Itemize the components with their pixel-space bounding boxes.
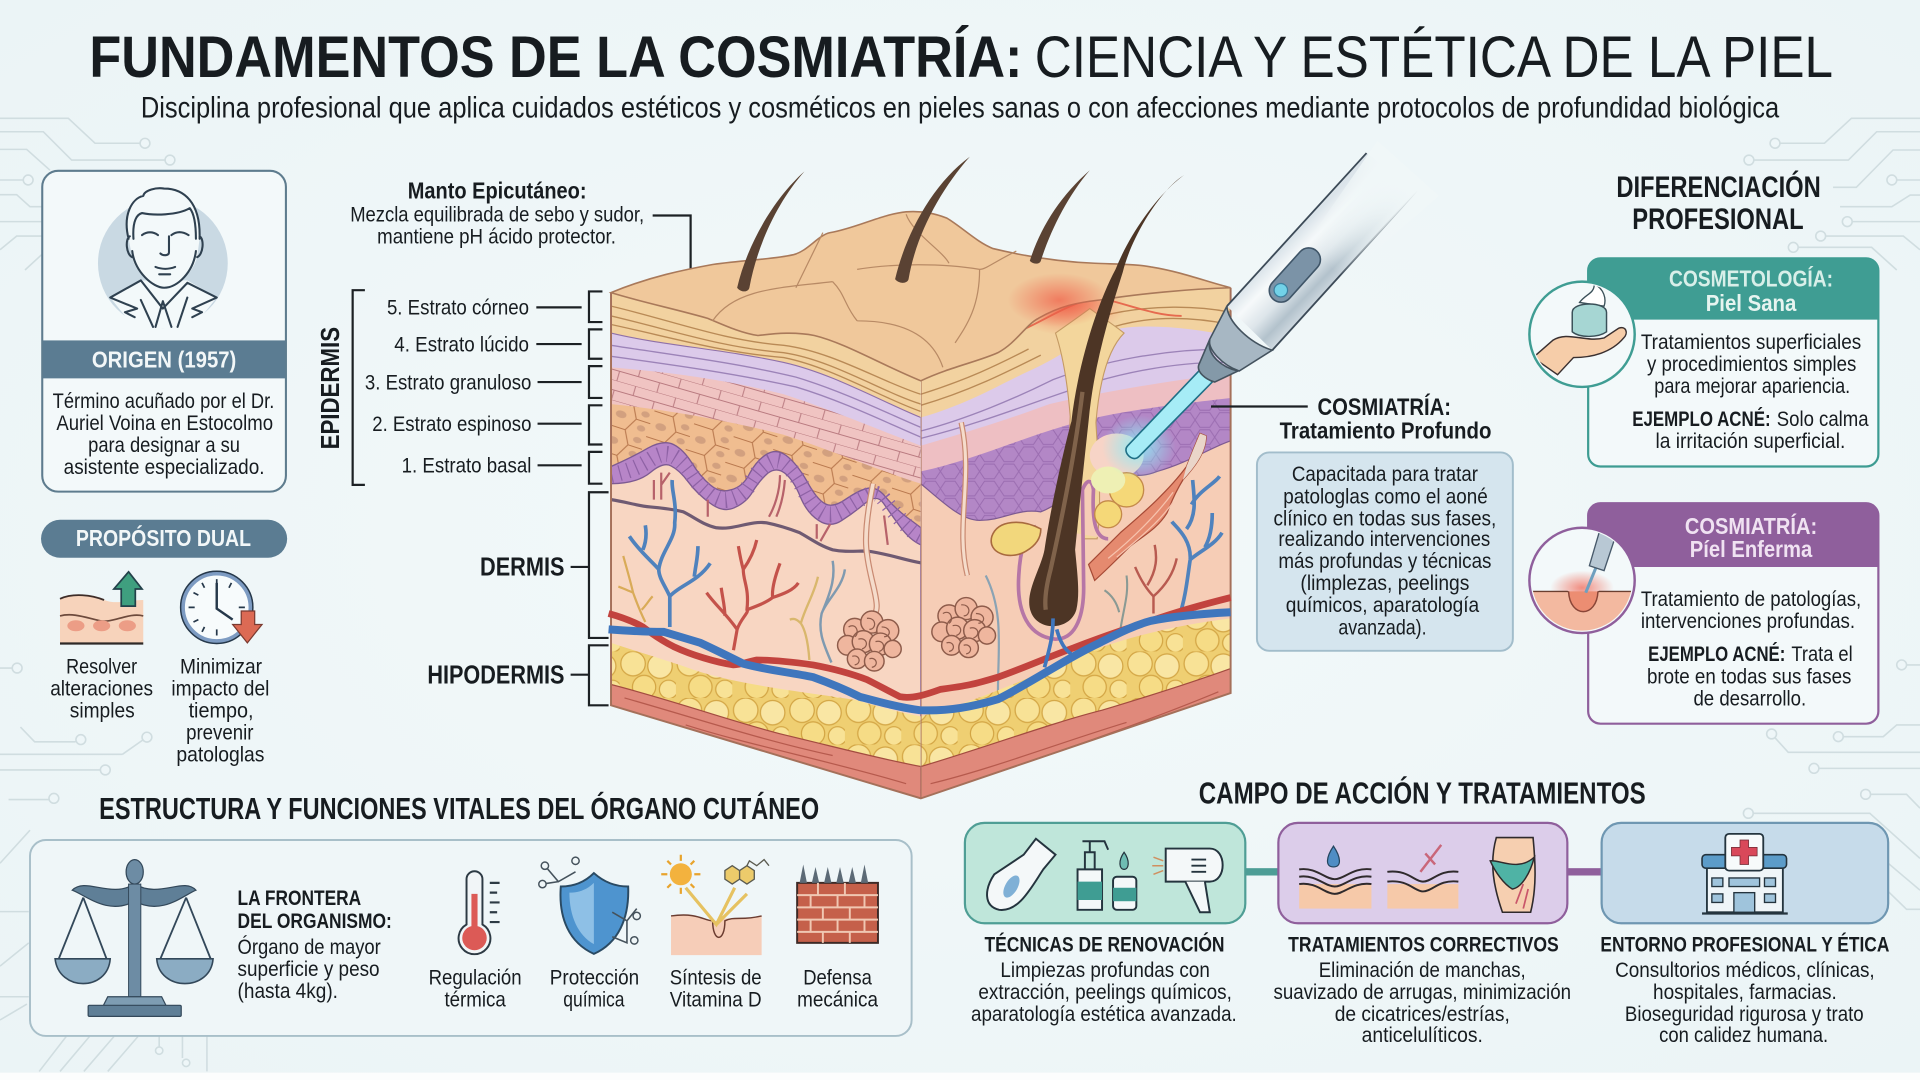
connector: purple: [1567, 868, 1602, 876]
panel: cosmiatría: Tratamiento de patologías,: [1641, 588, 1861, 611]
icon: treatment pen: [1102, 141, 1439, 479]
text: entorno profesional y ética: Bioseguridad rigurosa y trato: [1625, 1003, 1864, 1026]
labels: strata: 5. Estrato córneo: [387, 297, 529, 320]
panel: capacitada: más profundas y técnicas: [1278, 550, 1491, 573]
panel: cosmiatría: intervenciones profundas.: [1641, 610, 1855, 633]
label: epidermis: [317, 290, 365, 485]
text: tratamientos correctivos: Eliminación de manchas,: [1319, 959, 1526, 982]
panel: capacitada: químicos, aparatología: [1286, 594, 1480, 617]
title: [89, 24, 1833, 90]
text: técnicas de renovación: Limpiezas profundas con: [1000, 959, 1210, 982]
panel: funciones vitales: Regulación: [429, 966, 522, 989]
title: FUNDAMENTOS DE LA COSMIATRÍA:: [89, 24, 1022, 90]
panel: capacitada: patologlas como el aoné: [1283, 485, 1488, 508]
text: tratamientos correctivos: TRATAMIENTOS CORRECTIVOS: [1288, 933, 1559, 956]
panel: funciones vitales: Defensa: [803, 966, 872, 989]
text: origen body: [53, 390, 274, 479]
illustration: skin cross-section: [600, 157, 1237, 808]
panel: cosmiatría: Píel Enferma: [1690, 536, 1813, 562]
text: la frontera del organismo: Órgano de mayor: [238, 936, 381, 959]
text: entorno profesional y ética: con calidez humana.: [1659, 1024, 1828, 1047]
icon: vitamin D synthesis: [661, 855, 769, 955]
icon: light device: [1152, 849, 1223, 912]
labels: strata: [365, 291, 602, 484]
text: resolver: simples: [70, 700, 135, 723]
icon: shield: [539, 857, 640, 954]
text: tratamientos correctivos: anticelulíticos.: [1362, 1024, 1483, 1047]
panel: funciones vitales: química: [563, 989, 625, 1012]
pill: propósito dual: PROPÓSITO DUAL: [76, 525, 251, 551]
skin top surface: [611, 212, 1231, 381]
panel: cosmiatría: brote en todas sus fases: [1647, 665, 1851, 688]
labels: strata: 4. Estrato lúcido: [394, 333, 529, 356]
text: minimizar: [171, 655, 269, 767]
vessels main: [609, 598, 1231, 697]
panel: capacitada: (limplezas, peelings: [1300, 572, 1469, 595]
label: dermis: [480, 492, 609, 638]
text: resolver: Resolver: [66, 655, 137, 678]
panel: funciones vitales: térmica: [444, 989, 506, 1012]
blood vessels left: [629, 480, 710, 627]
text: minimizar: prevenir: [186, 722, 254, 745]
callout: manto epicutáneo: mantiene pH ácido protector.: [377, 226, 616, 249]
icon: brick wall: [797, 864, 878, 943]
callout: manto epicutáneo: Mezcla equilibrada de sebo y sudor,: [350, 204, 644, 227]
panel: cosmetología: EJEMPLO ACNÉ:: [1632, 408, 1771, 431]
panel: funciones vitales: mecánica: [797, 989, 878, 1012]
panel: cosmetología: Solo calma: [1777, 408, 1869, 431]
icon: pen on inflamed skin: [1529, 524, 1636, 637]
panel: cosmetología: y procedimientos simples: [1647, 353, 1856, 376]
text: origen body: asistente especializado.: [64, 456, 264, 479]
heading: campo de acción: CAMPO DE ACCIÓN Y TRATAMIENTOS: [1199, 774, 1646, 810]
labels: strata: 3. Estrato granuloso: [365, 371, 531, 394]
icon: ultrasonic device: [987, 839, 1056, 910]
inflammation: [1032, 298, 1120, 332]
text: entorno profesional y ética: Consultorios médicos, clínicas,: [1615, 959, 1875, 982]
panel: funciones vitales: Vitamina D: [670, 989, 762, 1012]
panel: capacitada: clínico en todas sus fases,: [1273, 507, 1496, 530]
labels: strata: 1. Estrato basal: [402, 455, 531, 478]
panel: cosmetología: Tratamientos superficiales: [1641, 331, 1861, 354]
text: entorno profesional y ética: hospitales, farmacias.: [1653, 981, 1837, 1004]
callout: cosmiatría tratamiento profundo: COSMIATRÍA:: [1318, 393, 1451, 421]
icon: clock: [181, 571, 262, 643]
text: origen body: para designar a su: [88, 434, 240, 457]
text: minimizar: tiempo,: [189, 700, 253, 723]
panel: técnicas de renovación: [965, 823, 1245, 923]
icon: bottles: [1078, 841, 1136, 910]
panel: cosmetología: [1588, 258, 1878, 467]
sweat gland right: [932, 598, 996, 658]
text: origen body: Término acuñado por el Dr.: [53, 390, 274, 413]
pill: propósito dual: [41, 520, 287, 558]
follicle sheath: [1018, 482, 1108, 639]
text: tratamientos correctivos: de cicatrices/estrías,: [1335, 1003, 1510, 1026]
text: resolver: [50, 655, 153, 723]
text: tratamientos correctivos: suavizado de arrugas, minimización: [1273, 981, 1571, 1004]
text: la frontera del organismo: (hasta 4kg).: [238, 980, 338, 1003]
panel: tratamientos correctivos: [1278, 823, 1567, 923]
panel: cosmiatría: COSMIATRÍA:: [1685, 513, 1817, 539]
connector: teal: [1245, 868, 1278, 876]
panel: cosmetología: Piel Sana: [1706, 290, 1797, 316]
labels: strata: 2. Estrato espinoso: [372, 413, 531, 436]
text: minimizar: Minimizar: [180, 655, 262, 678]
panel: origen: [42, 171, 286, 492]
arrector muscle: [1089, 433, 1206, 580]
label: hipodermis: [427, 645, 609, 705]
icon: skin with scar: [1387, 845, 1458, 909]
heading: diferenciación profesional: DIFERENCIACIÓN: [1616, 170, 1821, 204]
text: resolver: alteraciones: [50, 678, 153, 701]
text: técnicas de renovación: extracción, peelings químicos,: [978, 981, 1232, 1004]
panel: cosmiatría: EJEMPLO ACNÉ:: [1648, 643, 1785, 666]
heading: diferenciación profesional: [1616, 170, 1821, 236]
panel: capacitada: Capacitada para tratar: [1292, 463, 1478, 486]
panel: cosmetología: COSMETOLOGÍA:: [1669, 266, 1833, 292]
callout: cosmiatría tratamiento profundo: [1211, 393, 1491, 443]
label: hipodermis: HIPODERMIS: [427, 661, 564, 689]
text: tratamientos correctivos: [1273, 933, 1571, 1047]
icon: hospital: [1702, 834, 1788, 913]
panel: cosmetología: para mejorar apariencia.: [1654, 375, 1850, 398]
vessels right: [1172, 476, 1222, 616]
icon: body: [1490, 838, 1535, 912]
outer outline: [611, 288, 1231, 798]
text: entorno profesional y ética: [1600, 933, 1889, 1047]
hair follicle: [1029, 175, 1184, 626]
follicle funnel: [1056, 309, 1124, 539]
panel: funciones vitales: [30, 840, 912, 1036]
icon: hand with cream: [1529, 282, 1635, 387]
text: la frontera del organismo: [238, 887, 392, 1003]
callout: manto epicutáneo: [350, 177, 691, 298]
surface hairs: [737, 157, 1090, 291]
icon: scales: [55, 860, 213, 1016]
panel: cosmiatría: Trata el: [1791, 643, 1853, 666]
heading: origen: ORIGEN (1957): [92, 346, 236, 372]
panel: cosmiatría: [1588, 503, 1878, 724]
icon: skin improvement: [60, 572, 143, 643]
sweat gland: [838, 611, 901, 671]
panel: funciones vitales: Protección: [550, 966, 639, 989]
text: la frontera del organismo: superficie y peso: [238, 958, 380, 981]
text: origen body: Auriel Voina en Estocolmo: [56, 412, 273, 435]
text: técnicas de renovación: [971, 932, 1237, 1026]
panel: funciones vitales: Síntesis de: [670, 966, 762, 989]
panel: cosmiatría: de desarrollo.: [1693, 687, 1806, 710]
heading: diferenciación profesional: PROFESIONAL: [1632, 203, 1804, 236]
text: la frontera del organismo: LA FRONTERA: [238, 887, 361, 910]
skin right face: [918, 272, 1237, 808]
text: técnicas de renovación: aparatología estética avanzada.: [971, 1003, 1237, 1026]
panel: capacitada: [1257, 452, 1513, 651]
icon: skin with drop: [1299, 846, 1371, 909]
text: minimizar: patologlas: [176, 744, 264, 767]
panel: capacitada: realizando intervenciones: [1278, 528, 1490, 551]
text: técnicas de renovación: TÉCNICAS DE RENOVACIÓN: [984, 932, 1224, 956]
panel: entorno profesional: [1602, 823, 1888, 923]
callout: manto epicutáneo: Manto Epicutáneo:: [408, 177, 587, 203]
panel: capacitada: avanzada).: [1338, 616, 1427, 639]
skin left face: [612, 294, 921, 798]
label: dermis: DERMIS: [480, 554, 564, 582]
icon: thermometer: [459, 871, 500, 954]
text: la frontera del organismo: DEL ORGANISMO:: [238, 910, 392, 933]
text: minimizar: impacto del: [171, 678, 269, 701]
label: epidermis: EPIDERMIS: [317, 327, 345, 449]
sebaceous glands: [991, 522, 1041, 555]
panel: cosmetología: la irritación superficial.: [1656, 430, 1845, 453]
callout: cosmiatría tratamiento profundo: Tratamiento Profundo: [1280, 417, 1491, 443]
icon: portrait of Dr. Voina: [98, 188, 228, 328]
heading: estructura y funciones: ESTRUCTURA Y FUNCIONES VITALES DEL ÓRGANO CUTÁNEO: [99, 790, 819, 826]
